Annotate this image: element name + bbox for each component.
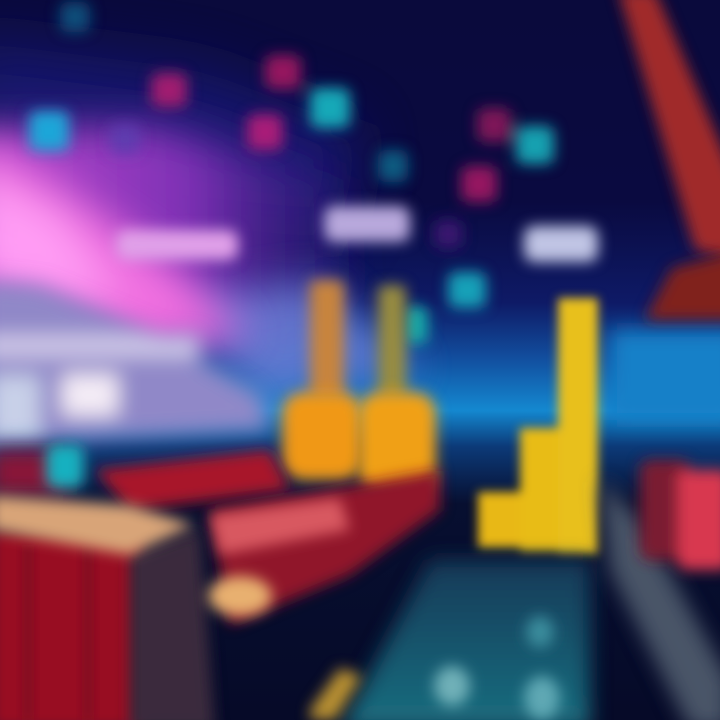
white warehouse on the left <box>0 280 270 445</box>
teal hexagon marker <box>46 444 84 488</box>
red containers <box>0 450 440 720</box>
red truck on the right <box>640 460 720 570</box>
crane arm <box>618 0 720 320</box>
yellow bar chart <box>478 298 598 554</box>
road <box>310 480 720 720</box>
floating squares <box>29 2 554 344</box>
orange factory towers <box>282 280 436 492</box>
pink light streak <box>0 140 250 345</box>
blurred labels <box>116 206 598 262</box>
